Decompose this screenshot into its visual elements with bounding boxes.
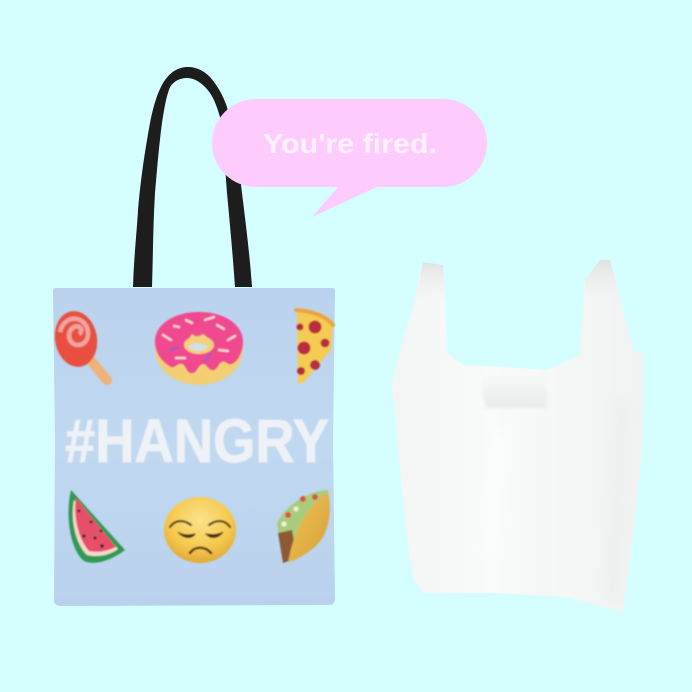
icon: donut [155, 312, 243, 385]
bubble shape [212, 99, 487, 217]
bubble text: You're fired. [263, 128, 437, 159]
tote hashtag text: #HANGRY [65, 407, 329, 475]
icon: pizza slice [296, 310, 333, 384]
tote shading [60, 598, 330, 602]
icon: plastic bag [392, 260, 643, 612]
infographic canvas [53, 67, 643, 612]
icon: tote bag [50, 67, 335, 606]
plastic bag handle shading [416, 260, 622, 305]
icon: taco [277, 490, 330, 563]
icon: lollipop [50, 308, 107, 380]
speech bubble [212, 99, 487, 217]
plastic bag creases [490, 400, 622, 600]
tote handle [133, 67, 252, 287]
plastic bag inner panel [481, 376, 547, 408]
icon: watermelon [69, 490, 125, 563]
plastic bag body [392, 260, 643, 612]
tote body [53, 288, 335, 606]
icon: unamused face emoji [164, 497, 236, 563]
